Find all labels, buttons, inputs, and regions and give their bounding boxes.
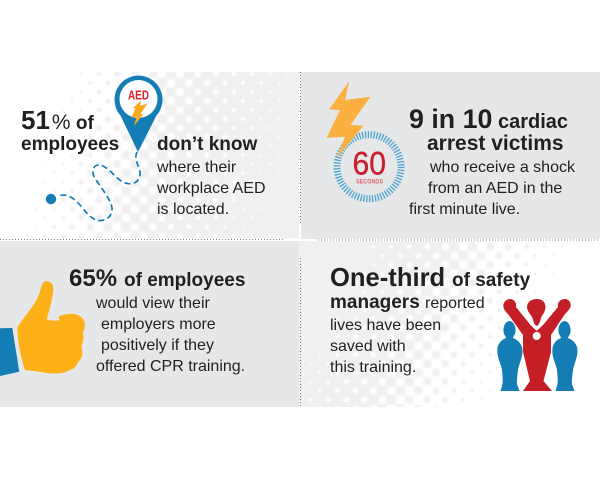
- panel: 9 in 10 cardiac arrest victims: [301, 72, 600, 239]
- icon: 60 seconds dial: [337, 135, 401, 199]
- icon: AED map pin: AED: [128, 88, 149, 102]
- text: 65% of employees would view their employers more positively: of employees: [124, 270, 245, 291]
- text: 65% of employees would view their employers more positively: offered CPR training.: [96, 358, 245, 375]
- text: one-third of safety managers reported lives saved: One-third: [330, 264, 445, 292]
- icon: dashed route: [46, 152, 140, 221]
- icon: three people with raised winner: [497, 299, 578, 391]
- icon: 60 seconds dial: SECONDS: [356, 178, 384, 185]
- text: 65% of employees would view their employers more positively: positively if they: [101, 337, 214, 354]
- text: one-third of safety managers reported lives saved: saved with: [330, 338, 406, 355]
- text: 9 in 10 cardiac arrest victims who receive a shock: [409, 104, 576, 218]
- text: 9 in 10 cardiac arrest victims who receive a shock: who receive a shock: [429, 159, 576, 176]
- text: don't know where their workplace AED is located: is located.: [157, 201, 229, 218]
- text: 65% of employees would view their employers more positively: would view their: [95, 295, 210, 312]
- text: don't know where their workplace AED is located: don’t know: [157, 134, 257, 155]
- text: one-third of safety managers reported lives saved: reported: [425, 295, 485, 312]
- text: one-third of safety managers reported lives saved: this training.: [330, 359, 416, 376]
- text: 9 in 10 cardiac arrest victims who receive a shock: first minute live.: [409, 201, 520, 218]
- text: one-third of safety managers reported lives saved: of safety: [452, 270, 531, 291]
- heading: 51% of employees: [21, 105, 119, 155]
- text: 9 in 10 cardiac arrest victims who receive a shock: arrest victims: [427, 132, 564, 155]
- text: don't know where their workplace AED is located: where their: [156, 159, 237, 176]
- text: 9 in 10 cardiac arrest victims who receive a shock: from an AED in the: [428, 180, 562, 197]
- text: don't know where their workplace AED is located: workplace AED: [156, 180, 266, 197]
- text: 9 in 10 cardiac arrest victims who receive a shock: 9 in 10 cardiac: [409, 104, 568, 134]
- text: 65% of employees would view their employers more positively: [69, 265, 245, 375]
- icon: 60 seconds dial: 60: [352, 146, 386, 182]
- heading: 51% of employees: 51% of: [21, 105, 94, 135]
- panel: 51% of employees: [0, 72, 299, 238]
- icon: lightning bolt: [327, 81, 370, 158]
- icon: thumbs up with blue sleeve: [0, 281, 85, 376]
- panel: 65% of employees: [0, 241, 300, 407]
- text: one-third of safety managers reported lives saved: lives have been: [330, 317, 441, 334]
- text: 65% of employees would view their employers more positively: 65%: [69, 265, 117, 292]
- heading: 51% of employees: employees: [21, 134, 119, 155]
- panel: one-third of safety managers: [300, 241, 600, 407]
- text: one-third of safety managers reported lives saved: [330, 264, 531, 376]
- text: one-third of safety managers reported lives saved: managers: [330, 292, 420, 313]
- text: 65% of employees would view their employers more positively: employers more: [101, 316, 216, 333]
- icon: AED map pin: [115, 76, 162, 152]
- text: don't know where their workplace AED is located: [156, 134, 266, 218]
